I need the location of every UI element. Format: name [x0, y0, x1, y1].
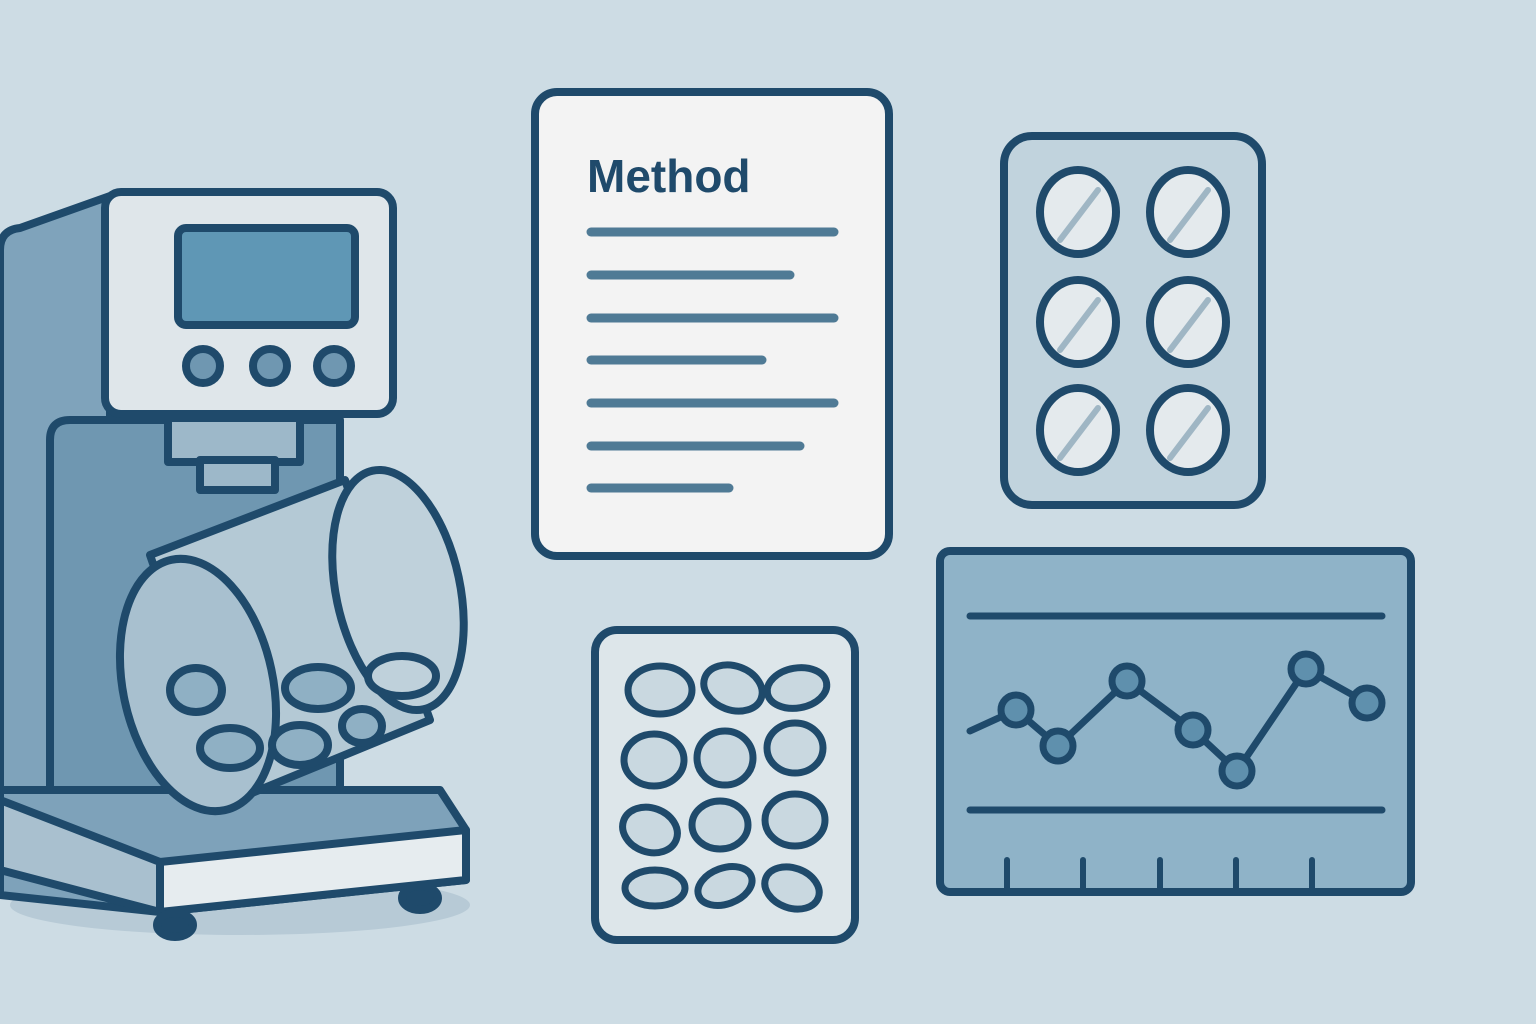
panel: method document [535, 92, 889, 556]
buttons [186, 349, 220, 383]
control housing [105, 192, 393, 414]
icon: tablet testing machine [0, 192, 484, 937]
drum [150, 480, 430, 800]
tablets in drum [170, 668, 222, 712]
chart: control line chart [940, 551, 1411, 892]
icon: blister pack [1004, 136, 1262, 505]
machine shadow [10, 875, 470, 935]
text lines [591, 232, 834, 488]
screen [178, 228, 355, 325]
machine pillar [50, 420, 340, 800]
icon: tablet tray [595, 630, 855, 940]
connector [168, 418, 300, 462]
machine back body [0, 196, 110, 800]
heading: Method: Method [587, 150, 751, 202]
base platform [0, 790, 466, 912]
